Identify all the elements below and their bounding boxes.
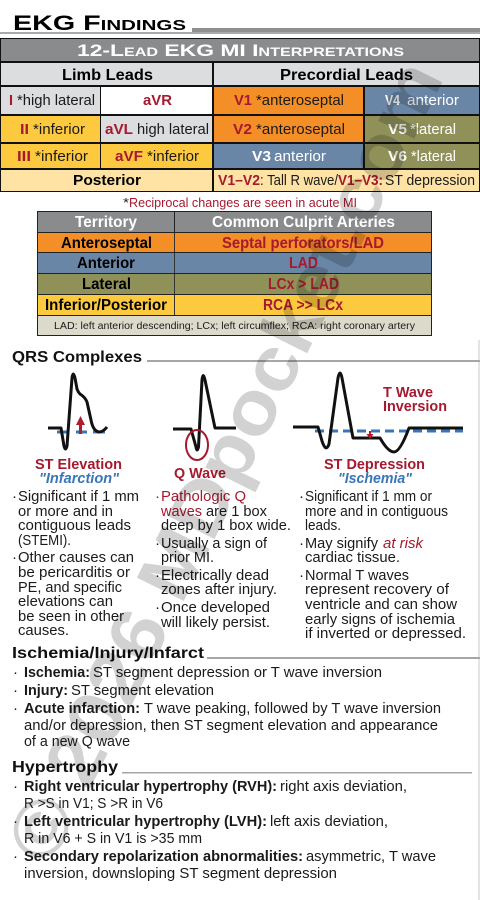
text block: hypertrophy criteria: · (13, 778, 18, 795)
lead aVF: aVF (115, 148, 143, 165)
text block: ST depression notes: early signs of ischemia (305, 611, 456, 628)
reciprocal changes note: Reciprocal changes are seen in acute MI (129, 195, 357, 210)
lead I: *high lateral (17, 92, 95, 109)
lead V3 (214, 144, 363, 168)
text block: Q wave notes: zones after injury. (161, 581, 277, 598)
lead V6: *lateral (411, 148, 456, 165)
text block: Q wave notes: Once developed (161, 599, 270, 616)
text block: hypertrophy criteria: Left ventricular hypertrophy (LVH): (24, 813, 267, 830)
reciprocal changes note: * (123, 195, 129, 210)
text block: Q wave notes: · (155, 535, 160, 552)
lead III (1, 144, 100, 168)
text block: ST elevation notes: or more and in (18, 503, 113, 520)
text block: Q wave notes: prior MI. (161, 549, 214, 566)
heading: Hypertrophy: Hypertrophy (12, 759, 118, 776)
posterior findings: V1–V2 (218, 172, 260, 189)
text block: ST depression notes: · (299, 535, 304, 552)
lead V2: *anteroseptal (256, 121, 345, 138)
chart: ST elevation waveform (48, 374, 107, 449)
text block: ST elevation notes: be seen in other (18, 608, 124, 625)
lead V5 (365, 116, 479, 142)
text block: ST depression notes: · (299, 488, 304, 505)
row: anterior: LAD (289, 255, 318, 272)
text block: ST depression notes: more and in contiguous (305, 503, 448, 520)
text block: hypertrophy criteria: Right ventricular hypertrophy (RVH): (24, 778, 277, 795)
label: T wave inversion: T Wave (383, 384, 433, 401)
lead aVF (101, 144, 212, 168)
text block: hypertrophy criteria: Secondary repolarization abnormalities: (24, 848, 303, 865)
lead V4: anterior (407, 92, 459, 109)
text block: hypertrophy criteria: R in V6 + S in V1 is >35 mm (24, 830, 202, 847)
lead aVL: aVL (105, 121, 133, 138)
text block: ST depression notes: at risk (383, 535, 424, 552)
text block: hypertrophy criteria: R >S in V1; S >R in V6 (24, 795, 163, 812)
arteries header (175, 212, 431, 232)
chart: Q wave waveform (173, 376, 236, 460)
arteries header: Common Culprit Arteries (212, 214, 395, 231)
text block: ischemia, injury, infarct definitions (13, 664, 441, 750)
text block: ST depression notes: represent recovery of (305, 581, 450, 598)
lead aVL (101, 116, 212, 142)
label: T wave inversion: Inversion (383, 398, 447, 415)
text block: ST depression notes: ventricle and can show (305, 596, 457, 613)
text block: hypertrophy criteria: · (13, 848, 18, 865)
lead V1 (214, 87, 363, 114)
text block: ST elevation notes: causes. (18, 622, 69, 639)
lead V6 (365, 144, 479, 168)
text block: ST elevation notes: be pericarditis or (18, 564, 130, 581)
row: anteroseptal (38, 233, 431, 252)
text block: ST elevation notes: · (12, 549, 17, 566)
lead II (1, 116, 100, 142)
lead I: I (9, 92, 13, 109)
text block: Q wave notes: Pathologic Q (161, 488, 246, 505)
text block: ST elevation notes: (STEMI). (18, 532, 71, 549)
lead V1: V1 (234, 92, 252, 109)
text block: ST depression notes: cardiac tissue. (305, 549, 400, 566)
text block: ischemia, injury, infarct definitions: of a new Q wave (24, 733, 130, 750)
text block: Q wave notes: will likely persist. (160, 614, 270, 631)
lead aVR (101, 87, 212, 114)
text block: ST depression notes: Significant if 1 mm or (305, 488, 432, 505)
label: ST depression (324, 456, 425, 487)
text block: ischemia, injury, infarct definitions: T wave peaking, followed by T wave inversion (144, 700, 441, 717)
table heading: 12-Lead EKG MI Interpretations (77, 41, 404, 60)
lead V3: anterior (274, 148, 326, 165)
territory header: Territory (75, 214, 137, 231)
heading: Ischemia/Injury/Infarct: Ischemia/Injury/Infarct (12, 645, 205, 662)
text block: ST elevation notes: PE, and specific (18, 579, 122, 596)
lead V3: V3 (252, 148, 271, 165)
row: anteroseptal: Septal perforators/LAD (222, 235, 384, 252)
text block: ST depression notes: if inverted or depressed. (305, 625, 466, 642)
lead II: *inferior (33, 121, 85, 138)
row: inferior/posterior: RCA >> LCx (263, 297, 343, 314)
text block: ischemia, injury, infarct definitions: Ischemia: (24, 664, 90, 681)
text block: hypertrophy criteria: left axis deviation, (270, 813, 388, 830)
text block: ST elevation notes: elevations can (18, 593, 113, 610)
lead I (1, 87, 100, 114)
label: ST depression: "Ischemia" (338, 470, 413, 487)
row: lateral: LCx > LAD (268, 276, 339, 293)
label: Q wave: Q Wave (174, 465, 226, 482)
text block: ST depression notes: · (299, 567, 304, 584)
lead V4: V4 (385, 92, 401, 109)
text block: ischemia, injury, infarct definitions: · (13, 682, 18, 699)
lead V6: V6 (388, 148, 407, 165)
lead V2 (214, 116, 363, 142)
row: inferior/posterior (38, 295, 431, 315)
text block: ischemia, injury, infarct definitions: Injury: (24, 682, 68, 699)
posterior label (1, 170, 212, 191)
label: ST depression: ST Depression (324, 456, 425, 473)
text block: Q wave notes: waves (160, 503, 202, 520)
text block: ST depression notes (299, 488, 466, 642)
text block: ischemia, injury, infarct definitions: · (13, 700, 18, 717)
text block: ST elevation notes: · (12, 488, 17, 505)
text block: hypertrophy criteria: · (13, 813, 18, 830)
title: EKG Findings (0, 12, 480, 35)
lead III: *inferior (35, 148, 88, 165)
territory header (38, 212, 174, 232)
abbreviation key: LAD: left anterior descending; LCx; left circumflex; RCA: right coronary artery (54, 320, 416, 332)
text block: ST elevation notes (12, 488, 139, 639)
lead V5: *lateral (410, 121, 456, 138)
lead aVR: aVR (143, 92, 172, 109)
watermark: © 2026 MDpocket.com (0, 47, 460, 875)
text block: hypertrophy criteria (13, 778, 436, 882)
text block: Q wave notes: · (155, 599, 160, 616)
lead V4 (365, 87, 479, 114)
text block: ST elevation notes: Other causes can (18, 549, 134, 566)
posterior findings (214, 170, 479, 191)
text block: ST elevation notes: contiguous leads (18, 517, 131, 534)
precordial leads heading (214, 63, 479, 85)
lead V2: V2 (233, 121, 252, 138)
row: anteroseptal: Anteroseptal (61, 235, 152, 252)
heading: QRS Complexes: QRS Complexes (12, 349, 142, 366)
text block: hypertrophy criteria: asymmetric, T wave (306, 848, 436, 865)
panel: 12-lead EKG table (0, 38, 480, 192)
text block: hypertrophy criteria: right axis deviation, (280, 778, 407, 795)
text block: Q wave notes: Electrically dead (161, 567, 269, 584)
lead aVF: *inferior (147, 148, 199, 165)
lead V5: V5 (388, 121, 407, 138)
text block: ischemia, injury, infarct definitions: Acute infarction: (24, 700, 140, 717)
posterior label: Posterior (73, 172, 141, 189)
text block: Q wave notes: · (155, 488, 160, 505)
row: inferior/posterior: Inferior/Posterior (45, 297, 167, 314)
text block: Q wave notes: are 1 box (206, 503, 267, 520)
posterior findings: V1–V3: (338, 172, 383, 189)
lead II: II (20, 121, 29, 138)
text block: Q wave notes: Usually a sign of (161, 535, 268, 552)
text block: hypertrophy criteria: inversion, downsloping ST segment depression (24, 865, 337, 882)
panel: territory and culprit arteries table (37, 211, 432, 336)
text block: ischemia, injury, infarct definitions: · (13, 664, 18, 681)
text block: ST elevation notes: Significant if 1 mm (18, 488, 139, 505)
text block: ST depression notes: leads. (305, 517, 341, 534)
row: anterior (38, 253, 431, 273)
text block: ischemia, injury, infarct definitions: ST segment depression or T wave inversion (93, 664, 382, 681)
text block: Q wave notes: deep by 1 box wide. (161, 517, 291, 534)
posterior findings: : Tall R wave/ (260, 172, 339, 189)
lead V1: *anteroseptal (256, 92, 344, 109)
lead aVL: high lateral (137, 121, 209, 138)
label: ST elevation (35, 456, 122, 487)
text block: ST depression notes: Normal T waves (305, 567, 409, 584)
text block: Q wave notes: · (155, 567, 160, 584)
row: lateral: Lateral (82, 276, 131, 293)
text block: ischemia, injury, infarct definitions: ST segment elevation (71, 682, 214, 699)
label: T wave inversion (383, 384, 447, 415)
precordial leads heading: Precordial Leads (280, 67, 413, 84)
text block: Q wave notes (155, 488, 291, 631)
limb leads heading (1, 63, 212, 85)
posterior findings: ST depression (385, 172, 475, 189)
abbreviation key (38, 316, 431, 335)
text block: ST depression notes: May signify (305, 535, 378, 552)
row: lateral (38, 274, 431, 294)
label: ST elevation: "Infarction" (39, 470, 120, 487)
title: EKG Findings: EKG Findings (13, 12, 186, 35)
chart: ST depression waveform (293, 373, 463, 452)
text block: ischemia, injury, infarct definitions: and/or depression, then ST segment elevation and appearance (24, 717, 438, 734)
row: anterior: Anterior (77, 255, 135, 272)
lead III: III (17, 148, 31, 165)
label: ST elevation: ST Elevation (35, 456, 122, 473)
table heading (1, 39, 479, 61)
limb leads heading: Limb Leads (62, 67, 153, 84)
